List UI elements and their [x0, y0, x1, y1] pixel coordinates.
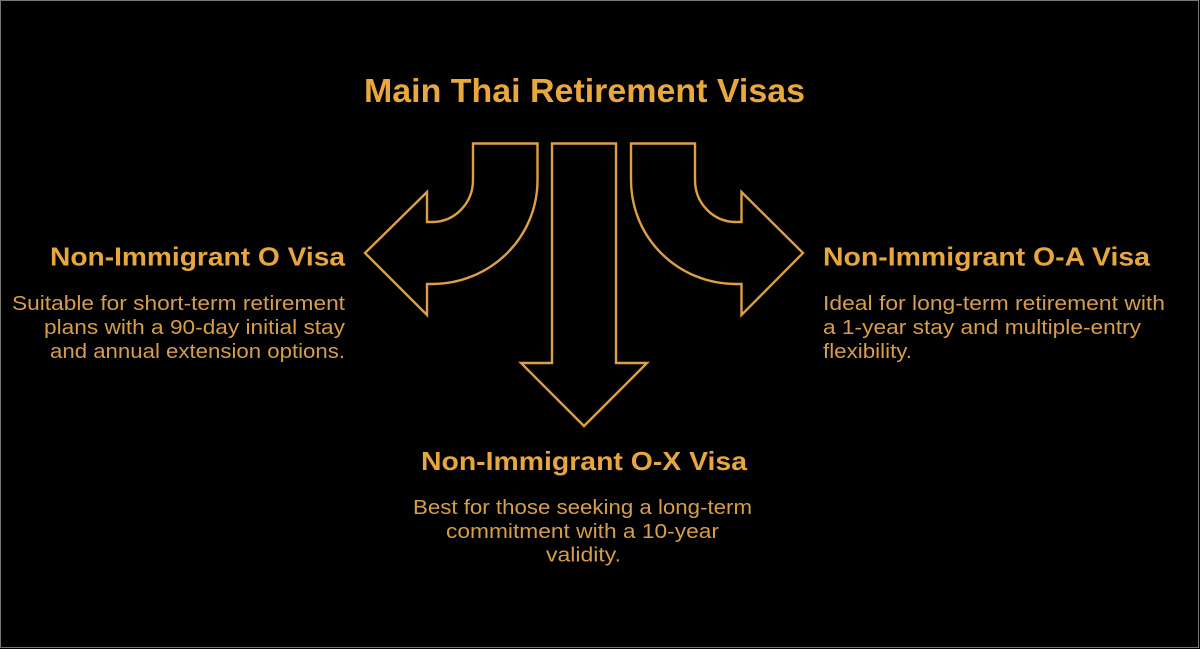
arrow: left curved	[365, 144, 538, 315]
description: O Visa: plans with a 90-day initial stay	[44, 316, 346, 339]
description: O-X Visa: Best for those seeking a long-term	[413, 496, 752, 519]
panel: Non-Immigrant O-A Visa	[823, 242, 1165, 363]
description: O-A Visa	[823, 292, 1165, 363]
description: O-A Visa: a 1-year stay and multiple-entry	[823, 316, 1142, 339]
description: O-X Visa: validity.	[546, 544, 621, 566]
description: O-X Visa	[413, 496, 752, 566]
arrow: center down	[521, 144, 647, 426]
description: O Visa	[12, 292, 346, 363]
heading: O-A Visa: Non-Immigrant O-A Visa	[823, 242, 1151, 272]
description: O-A Visa: flexibility.	[823, 340, 912, 363]
heading: O Visa: Non-Immigrant O Visa	[50, 242, 346, 272]
description: O Visa: Suitable for short-term retirement	[12, 292, 345, 315]
description: O-X Visa: commitment with a 10-year	[446, 520, 719, 543]
description: O Visa: and annual extension options.	[50, 340, 345, 363]
heading: O-X Visa: Non-Immigrant O-X Visa	[421, 446, 748, 476]
panel: Non-Immigrant O Visa	[12, 242, 346, 363]
description: O-A Visa: Ideal for long-term retirement with	[823, 292, 1165, 315]
arrow: right curved	[631, 144, 803, 315]
title: Main Thai Retirement Visas	[364, 72, 805, 109]
panel: Non-Immigrant O-X Visa	[413, 446, 752, 566]
